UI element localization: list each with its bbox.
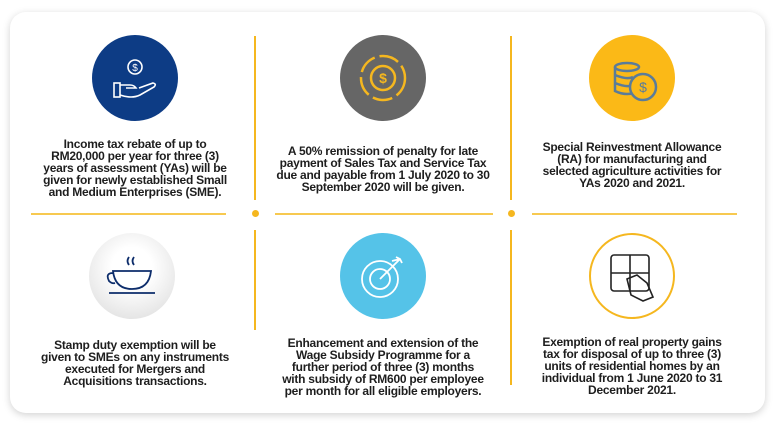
- icon: coins: [589, 35, 675, 121]
- text: wage subsidy: Wage Subsidy Programme for a: [296, 348, 470, 362]
- text: income tax rebate: given for newly established Small: [43, 173, 227, 187]
- text: income tax rebate: and Medium Enterprises (SME).: [49, 185, 221, 199]
- text: property gains: individual from 1 June 2020 to 31: [542, 371, 722, 385]
- text: stamp duty: [41, 338, 229, 388]
- text: property gains: units of residential homes by an: [544, 359, 720, 373]
- text: income tax rebate: [43, 137, 227, 199]
- text: property gains: tax for disposal of up to three (3): [543, 347, 721, 361]
- text: reinvestment allowance: YAs 2020 and 2021.: [579, 176, 685, 190]
- text: income tax rebate: Income tax rebate of up to: [64, 137, 206, 151]
- icon: coins: $: [639, 79, 647, 95]
- text: penalty remission: payment of Sales Tax and Service Tax: [280, 156, 486, 170]
- text: property gains: December 2021.: [588, 383, 676, 397]
- text: reinvestment allowance: (RA) for manufacturing and: [557, 152, 707, 166]
- text: income tax rebate: RM20,000 per year for three (3): [51, 149, 219, 163]
- text: penalty remission: [276, 144, 490, 194]
- text: wage subsidy: Enhancement and extension of the: [288, 336, 478, 350]
- text: reinvestment allowance: selected agriculture activities for: [543, 164, 721, 178]
- text: stamp duty: Stamp duty exemption will be: [54, 338, 216, 352]
- text: wage subsidy: further period of three (3) months: [292, 360, 474, 374]
- text: wage subsidy: per month for all eligible employers.: [285, 384, 481, 398]
- text: penalty remission: due and payable from 1 July 2020 to 30: [276, 168, 490, 182]
- text: property gains: Exemption of real property gains: [542, 335, 722, 349]
- icon: dollar target gray: [340, 35, 426, 121]
- icon: target arrow: [340, 233, 426, 319]
- text: stamp duty: executed for Mergers and: [65, 362, 205, 376]
- icon: cup: [89, 233, 175, 319]
- text: wage subsidy: with subsidy of RM600 per employee: [282, 372, 484, 386]
- text: property gains: [542, 335, 722, 397]
- icon: puzzle: [589, 233, 675, 319]
- text: penalty remission: September 2020 will be given.: [302, 180, 464, 194]
- icon: hand with coin: [92, 35, 178, 121]
- text: penalty remission: A 50% remission of penalty for late: [288, 144, 478, 158]
- text: stamp duty: given to SMEs on any instruments: [41, 350, 229, 364]
- icon: dollar target gray: $: [379, 70, 387, 86]
- text: stamp duty: Acquisitions transactions.: [63, 374, 207, 388]
- text: wage subsidy: [282, 336, 484, 398]
- text: reinvestment allowance: [543, 140, 722, 190]
- icon: hand with coin: $: [132, 63, 138, 74]
- text: income tax rebate: years of assessment (YAs) will be: [43, 161, 227, 175]
- text: reinvestment allowance: Special Reinvestment Allowance: [543, 140, 721, 154]
